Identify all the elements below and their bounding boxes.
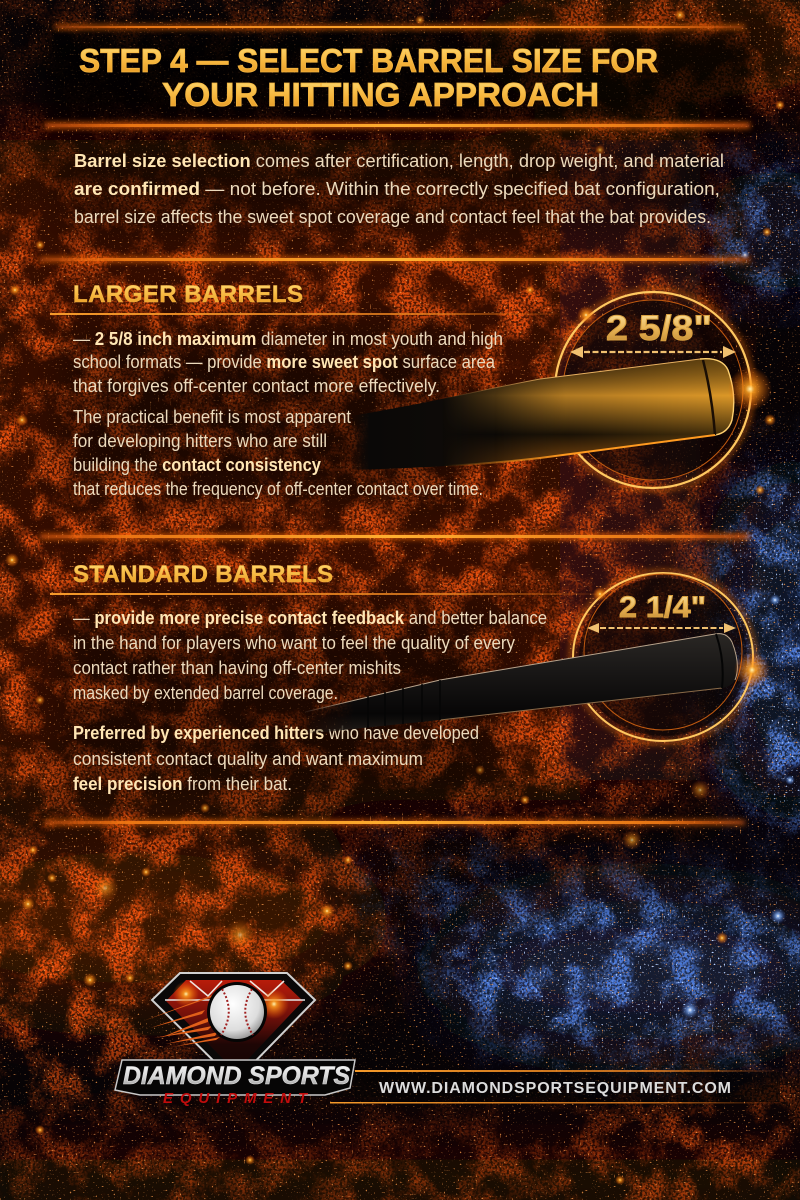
text: larger barrels: for developing hitters who are still: [73, 430, 327, 451]
logo: Diamond Sports Equipment: [115, 973, 355, 1107]
icon: speed streaks: [143, 993, 220, 1047]
title: YOUR HITTING APPROACH: [162, 76, 599, 113]
text: standard barrels: — provide more precise contact feedback and better balance: [73, 607, 547, 628]
text: larger barrels: The practical benefit is most apparent: [73, 406, 351, 427]
dimension arrow: [587, 623, 736, 633]
underline: standard barrels: [50, 593, 610, 595]
heading: larger barrels: LARGER BARRELS: [73, 281, 303, 308]
intro text: Barrel size selection comes after certification, length, drop weight, and material: [74, 150, 724, 171]
divider: below content: [45, 820, 745, 825]
icon: diamond: [152, 973, 315, 1082]
glint: [734, 652, 770, 688]
title: [79, 42, 658, 113]
gauge ring: [553, 290, 753, 490]
divider: between sections: [40, 534, 750, 539]
glint: [728, 367, 772, 411]
underline: larger barrels: [50, 313, 570, 315]
footer band: [330, 1070, 780, 1104]
divider: below intro: [40, 257, 750, 262]
intro text: [74, 150, 724, 227]
text: standard barrels: Preferred by experienced hitters who have developed: [73, 722, 479, 743]
text: larger barrels: building the contact consistency: [73, 454, 322, 475]
icon: baseball: [207, 982, 267, 1042]
wordmark banner: [115, 1060, 355, 1095]
text: standard barrels: in the hand for players who want to feel the quality of every: [73, 632, 516, 653]
text: standard barrels: masked by extended barrel coverage.: [73, 682, 338, 703]
bat: gold barrel: [350, 359, 734, 470]
dimension arrow: [570, 346, 736, 358]
title: STEP 4 — SELECT BARREL SIZE FOR: [79, 42, 658, 79]
text backdrop: darkened area behind copy: [60, 150, 720, 795]
wordmark: Diamond Sports: DIAMOND SPORTS: [123, 1062, 350, 1090]
website url: WWW.DIAMONDSPORTSEQUIPMENT.COM: [379, 1080, 731, 1097]
divider: below title: [45, 123, 750, 128]
heading: standard barrels: STANDARD BARRELS: [73, 561, 333, 588]
text: larger barrels: school formats — provide more sweet spot surface area: [73, 351, 496, 372]
intro text: are confirmed — not before. Within the correctly specified bat configuration,: [74, 178, 720, 199]
text: larger barrels: — 2 5/8 inch maximum diameter in most youth and high: [73, 328, 503, 349]
wordmark: Equipment: EQUIPMENT: [163, 1090, 309, 1107]
text: standard barrels: feel precision from their bat.: [73, 773, 292, 794]
value label: 2 5/8": [606, 309, 712, 348]
text: larger barrels: that forgives off-center contact more effectively.: [73, 375, 440, 396]
divider: top: [55, 25, 745, 29]
diagram: 2 5/8 inch barrel: [350, 290, 772, 490]
text: standard barrels: consistent contact quality and want maximum: [73, 748, 423, 769]
text: standard barrels: [73, 607, 547, 794]
bat: black barrel: [305, 634, 737, 734]
diagram: 2 1/4 inch barrel: [305, 571, 770, 743]
text: larger barrels: [73, 328, 503, 499]
title panel backdrop: [45, 32, 750, 120]
text: larger barrels: that reduces the frequency of off-center contact over time.: [73, 478, 483, 499]
intro text: barrel size affects the sweet spot coverage and contact feel that the bat provides.: [74, 206, 711, 227]
value label: 2 1/4": [619, 591, 706, 624]
text: standard barrels: contact rather than having off-center mishits: [73, 657, 401, 678]
gauge ring: [571, 571, 755, 743]
